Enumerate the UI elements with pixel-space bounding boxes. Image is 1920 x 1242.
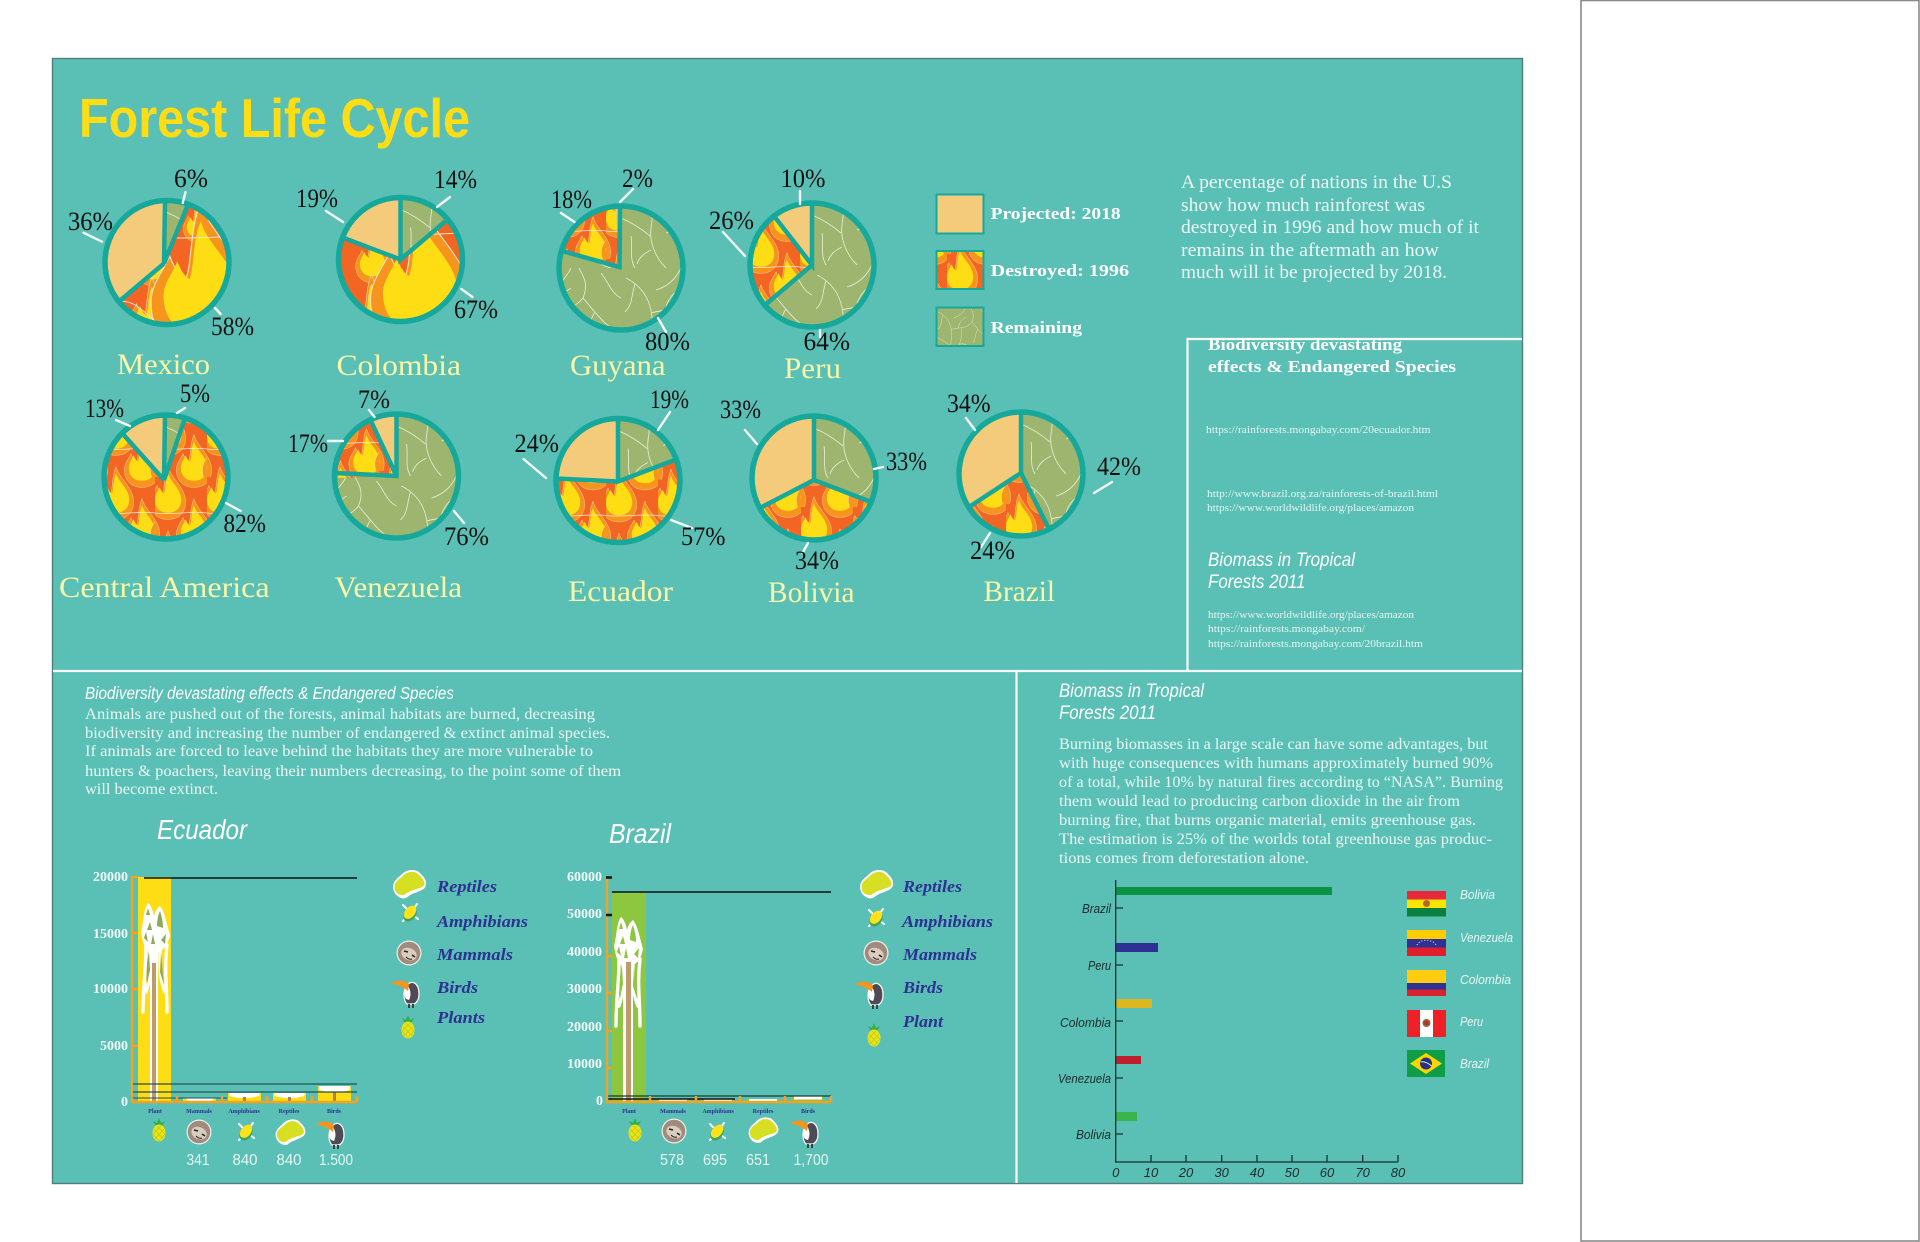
pie chart: Venezuela: [288, 385, 489, 604]
text block: biomass: them would lead to producing carbon dioxide in the air from: [1059, 793, 1461, 810]
text block: introduction: A percentage of nations in the U.S: [1181, 172, 1452, 193]
legend: Brazil species: Birds: [902, 978, 943, 997]
legend: Brazil species: Reptiles: [902, 877, 962, 896]
bar chart: Brazil species: 20000: [567, 1020, 602, 1035]
legend: Ecuador species: [391, 870, 528, 1038]
bar chart: Brazil species: 40000: [567, 945, 602, 960]
pie chart: Guyana: 18%: [551, 185, 592, 214]
text block: biodiversity: Animals are pushed out of the forests, animal habitats are burned, decreasing: [85, 706, 595, 723]
main teal panel: [52, 58, 1522, 1184]
bar chart: Brazil species: 60000: [567, 870, 602, 885]
pie chart: Central America: 5%: [180, 379, 210, 408]
bar chart: Brazil species: Amphibians: [702, 1109, 734, 1115]
bar chart: Brazil species: 695: [703, 1152, 727, 1169]
bar chart: biomass by country: Venezuela: [1058, 1071, 1111, 1086]
flag: Brazil: [1407, 1050, 1445, 1077]
text block: biomass: burning fire, that burns organic material, emits greenhouse gas.: [1059, 812, 1476, 829]
pie chart: Venezuela: 7%: [358, 385, 390, 414]
pie chart: Guyana: [551, 164, 690, 382]
bar chart: biomass by country: 70: [1355, 1165, 1371, 1180]
panel: sources: https://rainforests.mongabay.com/20brazil.htm: [1208, 638, 1423, 650]
text block: biomass: of a total, while 10% by natural fires according to “NASA”. Burning: [1059, 774, 1503, 791]
panel: sources: https://rainforests.mongabay.com/20ecuador.htm: [1206, 424, 1431, 436]
text block: introduction: [1181, 172, 1480, 283]
legend: Ecuador species: Mammals: [436, 945, 513, 964]
bar chart: Ecuador species: [93, 870, 357, 1169]
flag legend: Brazil: [1460, 1056, 1490, 1071]
legend: Brazil species: Amphibians: [901, 912, 993, 931]
pie chart: Ecuador: 57%: [681, 522, 726, 551]
pie chart: Brazil: Brazil: [984, 575, 1055, 608]
legend: pie chart categories: [936, 194, 1129, 346]
pie chart: Mexico: Mexico: [117, 348, 210, 381]
bar chart: biomass by country: Brazil: [1082, 901, 1112, 916]
bar chart: Brazil species: 50000: [567, 907, 602, 922]
bar chart: Ecuador species: Plant: [148, 1109, 162, 1115]
bar chart: biomass by country: 30: [1214, 1165, 1230, 1180]
text block: biodiversity: [85, 706, 622, 798]
text block: biomass: [1059, 736, 1503, 867]
pie chart: Brazil: [947, 389, 1141, 608]
bar chart: Brazil species: Mammals: [660, 1109, 686, 1115]
flag legend: [1407, 887, 1513, 1077]
legend: pie chart categories: Destroyed: 1996: [991, 261, 1129, 280]
bar chart: Brazil species: 1,700: [794, 1152, 829, 1169]
panel: sources: Biomass in Tropical: [1208, 550, 1356, 571]
text block: introduction: show how much rainforest was: [1181, 195, 1425, 216]
pie chart: Brazil: 24%: [970, 536, 1015, 565]
bar chart: Ecuador species: 20000: [93, 870, 128, 885]
text block: biomass: The estimation is 25% of the worlds total greenhouse gas produc-: [1059, 831, 1492, 848]
pie chart: Bolivia: Bolivia: [768, 576, 854, 609]
legend: Ecuador species: Birds: [436, 978, 478, 997]
pie chart: Colombia: [296, 165, 498, 382]
bar chart: Ecuador species: Mammals: [186, 1109, 212, 1115]
pie chart: Mexico: 6%: [174, 164, 208, 193]
legend: Brazil species: Mammals: [902, 945, 977, 964]
bar chart: biomass by country: 50: [1285, 1165, 1300, 1180]
pie chart: Ecuador: [514, 385, 726, 608]
pie chart: Central America: 82%: [224, 509, 266, 538]
pie chart: Central America: [59, 379, 270, 604]
text block: biomass: with huge consequences with humans approximately burned 90%: [1059, 755, 1493, 772]
text block: biodiversity: If animals are forced to leave behind the habitats they are more vulnerable to: [85, 743, 593, 760]
panel: sources: [1206, 335, 1456, 650]
legend: pie chart categories: Projected: 2018: [991, 204, 1121, 223]
legend: Ecuador species: Plants: [436, 1008, 485, 1027]
bar chart: biomass by country: 80: [1391, 1165, 1406, 1180]
white panel dividers: [53, 339, 1522, 1183]
text block: introduction: destroyed in 1996 and how much of it: [1181, 217, 1480, 238]
bar chart: Ecuador species: 5000: [100, 1039, 128, 1054]
legend: Ecuador species: Reptiles: [436, 877, 497, 896]
pie chart: Peru: [709, 164, 874, 385]
text block: biodiversity: will become extinct.: [85, 781, 218, 798]
bar chart: biomass by country: 0: [1112, 1165, 1120, 1180]
bar chart: Ecuador species: Birds: [327, 1109, 342, 1115]
pie chart: Colombia: 19%: [296, 184, 338, 213]
flag legend: Venezuela: [1460, 930, 1513, 945]
pie chart: Central America: Central America: [59, 571, 270, 604]
bar chart: biomass by country: 20: [1178, 1165, 1194, 1180]
flag legend: Colombia: [1460, 972, 1511, 987]
bar chart: Brazil species: Birds: [801, 1109, 816, 1115]
text block: introduction: remains in the aftermath an how: [1181, 240, 1439, 261]
text block: biomass: tions comes from deforestation alone.: [1059, 850, 1309, 867]
bar chart: Brazil species: Reptiles: [753, 1109, 774, 1115]
pie chart: Peru: 64%: [804, 327, 850, 356]
bar chart: Ecuador species: 10000: [93, 982, 128, 997]
legend: Ecuador species: Amphibians: [436, 912, 528, 931]
heading: biomass: [1059, 681, 1205, 724]
panel: sources: https://www.worldwildlife.org/places/amazon: [1208, 609, 1415, 621]
title: Forest Life Cycle: [79, 87, 470, 149]
heading: biomass: Biomass in Tropical: [1059, 681, 1205, 702]
text block: introduction: much will it be projected by 2018.: [1181, 262, 1447, 283]
bar chart: Brazil species: 578: [660, 1152, 684, 1169]
pie chart: Colombia: 14%: [434, 165, 477, 194]
pie chart: Ecuador: Ecuador: [568, 575, 673, 608]
bar chart: Brazil species: 10000: [567, 1057, 602, 1072]
bar chart: Brazil species: [567, 870, 831, 1169]
pie chart: Venezuela: 17%: [288, 429, 328, 458]
bar chart: Ecuador species: Reptiles: [279, 1109, 300, 1115]
pie chart: Bolivia: 34%: [795, 546, 839, 575]
text block: biodiversity: hunters & poachers, leaving their numbers decreasing, to the point some of them: [85, 763, 622, 780]
chart heading: Ecuador: Ecuador: [157, 814, 248, 845]
pie chart: Mexico: 36%: [68, 207, 113, 236]
panel: sources: http://www.brazil.org.za/rainforests-of-brazil.html: [1207, 488, 1438, 500]
bar chart: Ecuador species: 1.500: [319, 1152, 353, 1169]
pie chart: Mexico: 58%: [211, 312, 254, 341]
flag legend: Bolivia: [1460, 887, 1495, 902]
heading: biodiversity: Biodiversity devastating effects & Endangered Species: [85, 683, 454, 703]
flag: Venezuela: [1407, 930, 1446, 956]
pie chart: Colombia: Colombia: [336, 349, 461, 382]
bar chart: Brazil species: Plant: [622, 1109, 636, 1115]
flag: Colombia: [1407, 970, 1446, 996]
bar chart: Ecuador species: Amphibians: [228, 1109, 260, 1115]
panel: sources: Forests 2011: [1208, 572, 1306, 593]
bar chart: Ecuador species: 840: [276, 1152, 302, 1169]
panel: sources: Biodiversity devastating: [1208, 335, 1403, 354]
legend: pie chart categories: Remaining: [991, 318, 1083, 337]
pie chart: Ecuador: 19%: [650, 385, 689, 414]
bar chart: Brazil species: 0: [596, 1094, 603, 1109]
pie chart: Central America: 13%: [85, 394, 124, 423]
bar chart: Brazil species: 651: [746, 1152, 770, 1169]
bar chart: Ecuador species: 341: [186, 1152, 210, 1169]
empty white artboard frame at right: [1581, 0, 1919, 1241]
pie chart: Venezuela: 76%: [444, 522, 489, 551]
pie chart: Brazil: 42%: [1097, 452, 1141, 481]
flag: Peru: [1407, 1010, 1446, 1037]
pie chart: Venezuela: Venezuela: [334, 571, 462, 604]
pie chart: Peru: 26%: [709, 206, 754, 235]
pie chart: Guyana: 80%: [645, 327, 690, 356]
pie chart: Bolivia: [720, 395, 927, 609]
heading: biomass: Forests 2011: [1059, 703, 1156, 724]
bar chart: biomass by country: Bolivia: [1076, 1127, 1111, 1142]
bar chart: biomass by country: Colombia: [1060, 1015, 1111, 1030]
panel: sources: effects & Endangered Species: [1208, 357, 1456, 376]
bar chart: biomass by country: 40: [1250, 1165, 1265, 1180]
bar chart: biomass by country: [1058, 880, 1406, 1180]
pie chart: Guyana: 2%: [622, 164, 653, 193]
pie chart: Ecuador: 24%: [514, 429, 559, 458]
panel: sources: https://rainforests.mongabay.com/: [1208, 623, 1366, 635]
bar chart: biomass by country: Peru: [1088, 958, 1111, 973]
chart heading: Brazil: Brazil: [609, 818, 672, 849]
panel: sources: https://www.worldwildlife.org/places/amazon: [1207, 502, 1415, 514]
pie chart: Peru: 10%: [780, 164, 826, 193]
pie chart: Brazil: 34%: [947, 389, 991, 418]
pie chart: Bolivia: 33%: [886, 447, 927, 476]
pie chart: Peru: Peru: [784, 352, 841, 385]
pie chart: Bolivia: 33%: [720, 395, 761, 424]
flag legend: Peru: [1460, 1014, 1483, 1029]
text block: biodiversity: biodiversity and increasing the number of endangered & extinct animal species.: [85, 725, 610, 742]
pie chart: Colombia: 67%: [454, 295, 498, 324]
bar chart: Ecuador species: 0: [121, 1095, 128, 1110]
bar chart: Brazil species: 30000: [567, 982, 602, 997]
legend: Brazil species: [855, 870, 993, 1046]
flag: Bolivia: [1407, 891, 1446, 916]
bar chart: Ecuador species: 840: [232, 1152, 258, 1169]
pie chart: Mexico: [68, 164, 254, 381]
bar chart: biomass by country: 60: [1320, 1165, 1335, 1180]
legend: Brazil species: Plant: [902, 1012, 944, 1031]
text block: biomass: Burning biomasses in a large scale can have some advantages, but: [1059, 736, 1489, 753]
bar chart: Ecuador species: 15000: [93, 927, 128, 942]
pie chart: Guyana: Guyana: [570, 349, 666, 382]
bar chart: biomass by country: 10: [1144, 1165, 1159, 1180]
